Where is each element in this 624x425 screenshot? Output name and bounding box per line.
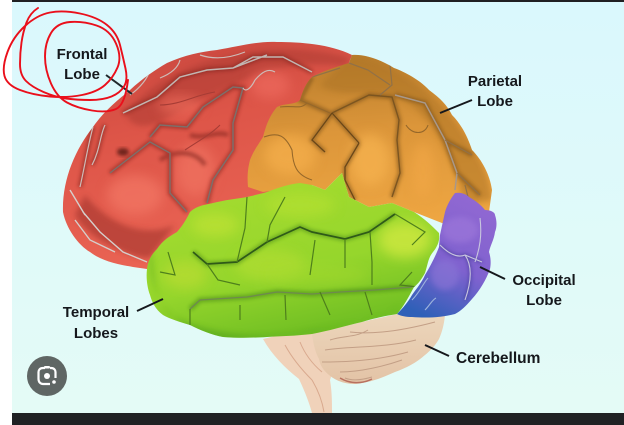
label: frontal lobe: Lobe	[64, 66, 100, 83]
occipital lobe	[397, 193, 496, 318]
frontal lobe	[63, 42, 352, 269]
label: occipital lobe	[480, 267, 576, 309]
label: parietal lobe: Lobe	[477, 93, 513, 110]
label: parietal lobe: Parietal	[468, 73, 522, 90]
illustration: brain	[63, 42, 496, 413]
brain stem	[263, 330, 345, 413]
label: temporal lobes	[63, 299, 163, 342]
parietal lobe	[248, 55, 492, 225]
hand-drawn red scribble circles	[4, 8, 128, 111]
Google Lens button	[27, 356, 67, 396]
label: temporal lobes: Temporal	[63, 304, 129, 321]
label: occipital lobe: Occipital	[512, 272, 576, 289]
label: frontal lobe	[57, 46, 132, 94]
label: parietal lobe	[440, 73, 522, 113]
temporal lobe	[147, 173, 439, 340]
label: cerebellum: Cerebellum	[456, 350, 540, 367]
bottom dark bar	[12, 413, 624, 425]
top dark bar	[12, 0, 624, 2]
cerebellum	[312, 314, 445, 384]
label: cerebellum	[425, 345, 540, 367]
label: temporal lobes: Lobes	[74, 325, 118, 342]
label: frontal lobe: Frontal	[57, 46, 107, 63]
label: occipital lobe: Lobe	[526, 292, 562, 309]
